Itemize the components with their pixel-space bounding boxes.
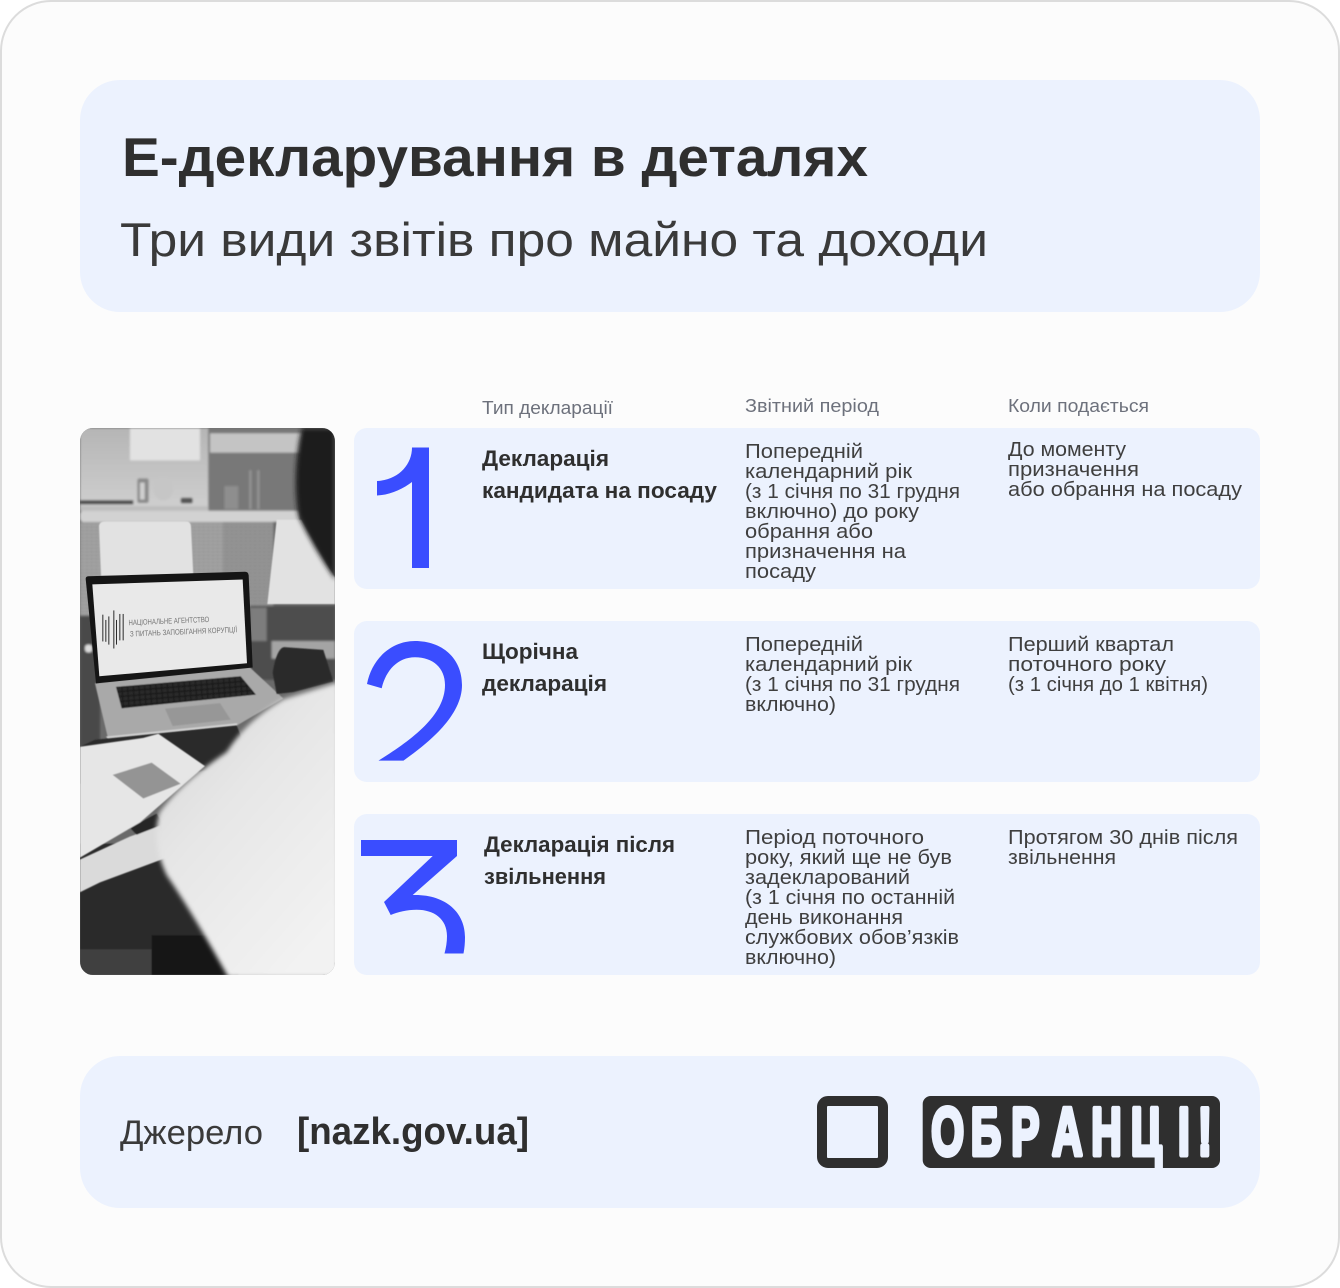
table column headers: Звітний період [745,396,880,416]
panel: header [80,80,1260,312]
source label: Джерело [120,1114,263,1152]
laptop screen [86,572,253,683]
table column headers: Тип декларації [482,398,613,418]
reporting period: включно) [745,947,836,969]
screen logo marks [102,610,124,648]
declaration type [482,446,718,503]
declaration type: декларація [482,671,607,696]
declaration type: Декларація [482,446,609,471]
subtitle: Три види звітів про майно та доходи [120,213,988,266]
when filed: Протягом 30 днів після [1008,827,1238,849]
reporting period: посаду [745,561,816,583]
declaration type: звільнення [484,864,606,889]
reporting period: Попередній [745,441,863,463]
reporting period: призначення на [745,541,907,563]
declaration type [482,639,607,696]
reporting period: календарний рік [745,461,912,483]
table column headers: Коли подається [1008,396,1149,416]
reporting period: календарний рік [745,654,912,676]
trackpad [165,703,231,726]
when filed: звільнення [1008,847,1116,869]
reporting period: (з 1 січня по 31 грудня [745,481,960,503]
logo wordmark: ОБРАНЦІ! [931,1094,1212,1169]
source link: [nazk.gov.ua] [297,1111,529,1153]
person's shoulder in white shirt [156,682,338,977]
photo: laptop on a desk [80,428,338,977]
reporting period: (з 1 січня по 31 грудня [745,674,960,696]
reporting period: обрання або [745,521,873,543]
table column headers [482,396,1149,418]
when filed: призначення [1008,459,1139,481]
number 2 [367,641,462,761]
reporting period: (з 1 січня по останній [745,887,955,909]
number 1 [377,448,429,568]
when filed: (з 1 січня до 1 квітня) [1008,674,1208,696]
photo: laptop on a desk: З ПИТАНЬ ЗАПОБІГАННЯ КОРУПЦІЇ [130,625,238,639]
dark table [80,726,253,975]
panel: row 1 [354,428,1260,589]
reporting period: службових обов’язків [745,927,959,949]
keyboard [116,676,256,708]
chairs [99,520,335,604]
declaration type: кандидата на посаду [482,478,718,503]
screen logo text: НАЦІОНАЛЬНЕ АГЕНТСТВО [128,615,209,627]
panel: footer [80,1056,1260,1208]
when filed: До моменту [1008,439,1126,461]
reporting period: року, який ще не був [745,847,952,869]
title: Е-декларування в деталях [122,126,868,188]
when filed: Перший квартал [1008,634,1174,656]
icon: logo square [822,1101,883,1163]
when filed [1008,634,1208,696]
reporting period: включно) [745,694,836,716]
reporting period: день виконання [745,907,903,929]
kitchen background [80,428,335,747]
declaration type: Щорічна [482,639,579,664]
when filed: поточного року [1008,654,1166,676]
notebooks [80,734,205,892]
reporting period: Попередній [745,634,863,656]
declaration type [484,832,675,889]
panel: row 3 [354,814,1260,975]
phone / bag [273,647,333,694]
reporting period [745,634,960,716]
reporting period [745,441,960,583]
panel: row 2 [354,621,1260,782]
reporting period [745,827,959,969]
reporting period: включно) до року [745,501,919,523]
when filed [1008,439,1242,501]
laptop [95,667,283,740]
declaration type: Декларація після [484,832,675,857]
number 3 [361,840,465,954]
reporting period: Період поточного [745,827,924,849]
reporting period: задекларований [745,867,910,889]
when filed: або обрання на посаду [1008,479,1242,501]
head silhouette [296,428,335,579]
laptop base [95,667,283,740]
when filed [1008,827,1238,869]
